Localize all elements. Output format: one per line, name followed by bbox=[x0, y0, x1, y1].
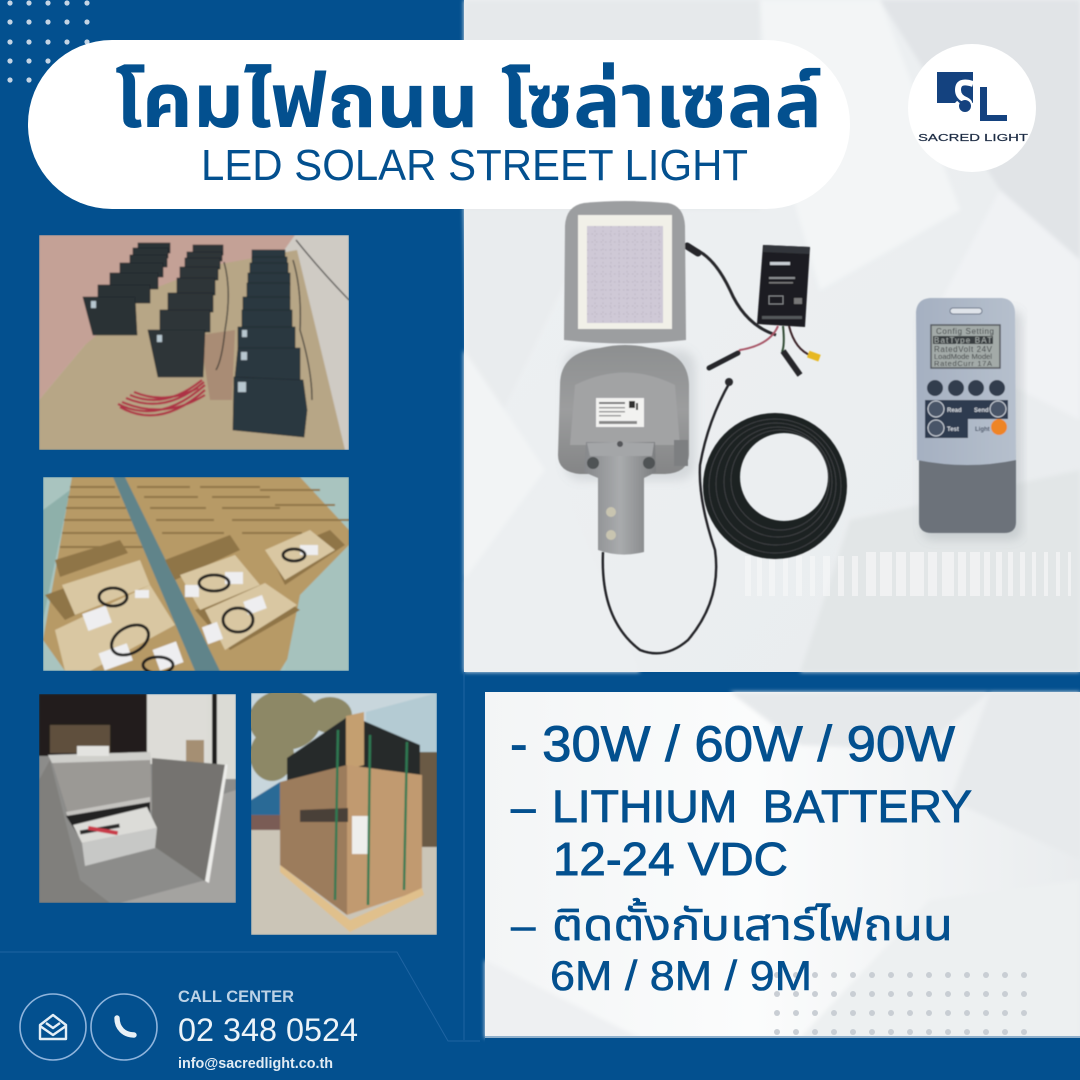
contact details: info@sacredlight.co.th bbox=[178, 1056, 333, 1072]
remote buttons: Send bbox=[974, 408, 989, 414]
mount bracket bbox=[584, 442, 656, 555]
contact details bbox=[178, 988, 358, 1072]
title: Thai: โคมไฟถนน โซล่าเซลล์ bbox=[115, 59, 822, 144]
dot pattern: specifications panel bbox=[774, 972, 1027, 1035]
spec: installation: – bbox=[511, 901, 536, 950]
lamp shadow bbox=[565, 350, 695, 480]
remote screen bbox=[931, 325, 1000, 368]
remote buttons: Read bbox=[947, 408, 962, 414]
cable: lamp loop bbox=[603, 382, 730, 653]
faint stripes bbox=[745, 552, 1071, 596]
charge controller bbox=[757, 245, 810, 327]
lamp label bbox=[596, 398, 644, 427]
white packets bbox=[82, 545, 318, 671]
product photo: remote control bbox=[916, 298, 1022, 540]
cable coil bbox=[703, 413, 847, 559]
battery column 1 bbox=[83, 243, 170, 335]
trees bbox=[249, 690, 352, 781]
red cables bbox=[118, 380, 205, 415]
contact details: 02 348 0524 bbox=[178, 1012, 358, 1048]
lamp body bbox=[558, 345, 689, 474]
box interiors bbox=[55, 530, 335, 671]
controller wires bbox=[735, 326, 778, 355]
spec: battery: LITHIUM BATTERY bbox=[552, 781, 972, 832]
spec: installation: ติดตั้งกับเสาร์ไฟถนน bbox=[552, 898, 953, 950]
box shadows bbox=[45, 530, 345, 650]
remote buttons: Test bbox=[947, 427, 959, 433]
bottom band bbox=[485, 1038, 1080, 1080]
icon: phone bbox=[91, 994, 157, 1060]
footer lines bbox=[0, 672, 480, 1041]
upper box rows bbox=[60, 487, 349, 547]
cartons bbox=[280, 765, 347, 915]
subtitle: LED SOLAR STREET LIGHT bbox=[201, 141, 748, 190]
spec: battery: – bbox=[511, 783, 536, 832]
spec: battery: 12-24 VDC bbox=[553, 833, 788, 885]
pallet bbox=[280, 865, 424, 932]
panels bbox=[287, 715, 420, 785]
remote lower bbox=[919, 455, 1016, 533]
cabinet bbox=[53, 751, 152, 811]
blue beam bbox=[113, 477, 220, 671]
battery column 3 bbox=[233, 250, 307, 437]
connectors bbox=[709, 353, 738, 368]
remote screen: Config Setting bbox=[936, 327, 994, 336]
remote buttons: Light bbox=[975, 427, 990, 433]
logo wordmark: SACRED LIGHT bbox=[918, 132, 1029, 144]
remote screen: RatedVolt 24V bbox=[934, 345, 993, 354]
battery labels bbox=[91, 301, 247, 392]
logo mark bbox=[937, 72, 1007, 121]
straps bbox=[335, 730, 407, 905]
photo: steel cabinet with battery bbox=[39, 694, 236, 903]
lamp head bbox=[564, 201, 686, 344]
battery leads bbox=[216, 240, 349, 400]
LED panel bbox=[578, 215, 672, 329]
panel: product background bbox=[464, 0, 1080, 672]
remote shadow bbox=[922, 310, 1022, 540]
battery column 2 bbox=[148, 245, 223, 377]
spec: battery bbox=[511, 781, 972, 885]
remote screen: RatedCurr 17A bbox=[934, 359, 992, 368]
icon: mail bbox=[20, 994, 86, 1060]
battery bbox=[73, 807, 157, 843]
remote screen: BatType BAT bbox=[934, 336, 992, 345]
latch bbox=[674, 440, 688, 466]
title banner bbox=[28, 40, 850, 209]
cable coils bbox=[99, 549, 305, 673]
spec: installation bbox=[511, 898, 953, 999]
logo bbox=[908, 44, 1036, 172]
cable: lamp to controller bbox=[688, 247, 776, 335]
photo: packed boxes bbox=[43, 477, 349, 673]
product photo: street light bbox=[558, 201, 847, 653]
photo: batteries bbox=[39, 235, 349, 450]
remote buttons bbox=[925, 380, 1008, 438]
remote screen: LoadMode Model bbox=[934, 352, 992, 361]
remote upper bbox=[916, 298, 1016, 465]
dot pattern: top left bbox=[7, 0, 90, 83]
contact details: CALL CENTER bbox=[178, 988, 294, 1006]
photo: palletised solar panels bbox=[249, 690, 437, 935]
spec: installation: 6M / 8M / 9M bbox=[550, 952, 812, 999]
panel: specifications background bbox=[485, 692, 1080, 1038]
spec: wattage: - 30W / 60W / 90W bbox=[510, 716, 956, 772]
